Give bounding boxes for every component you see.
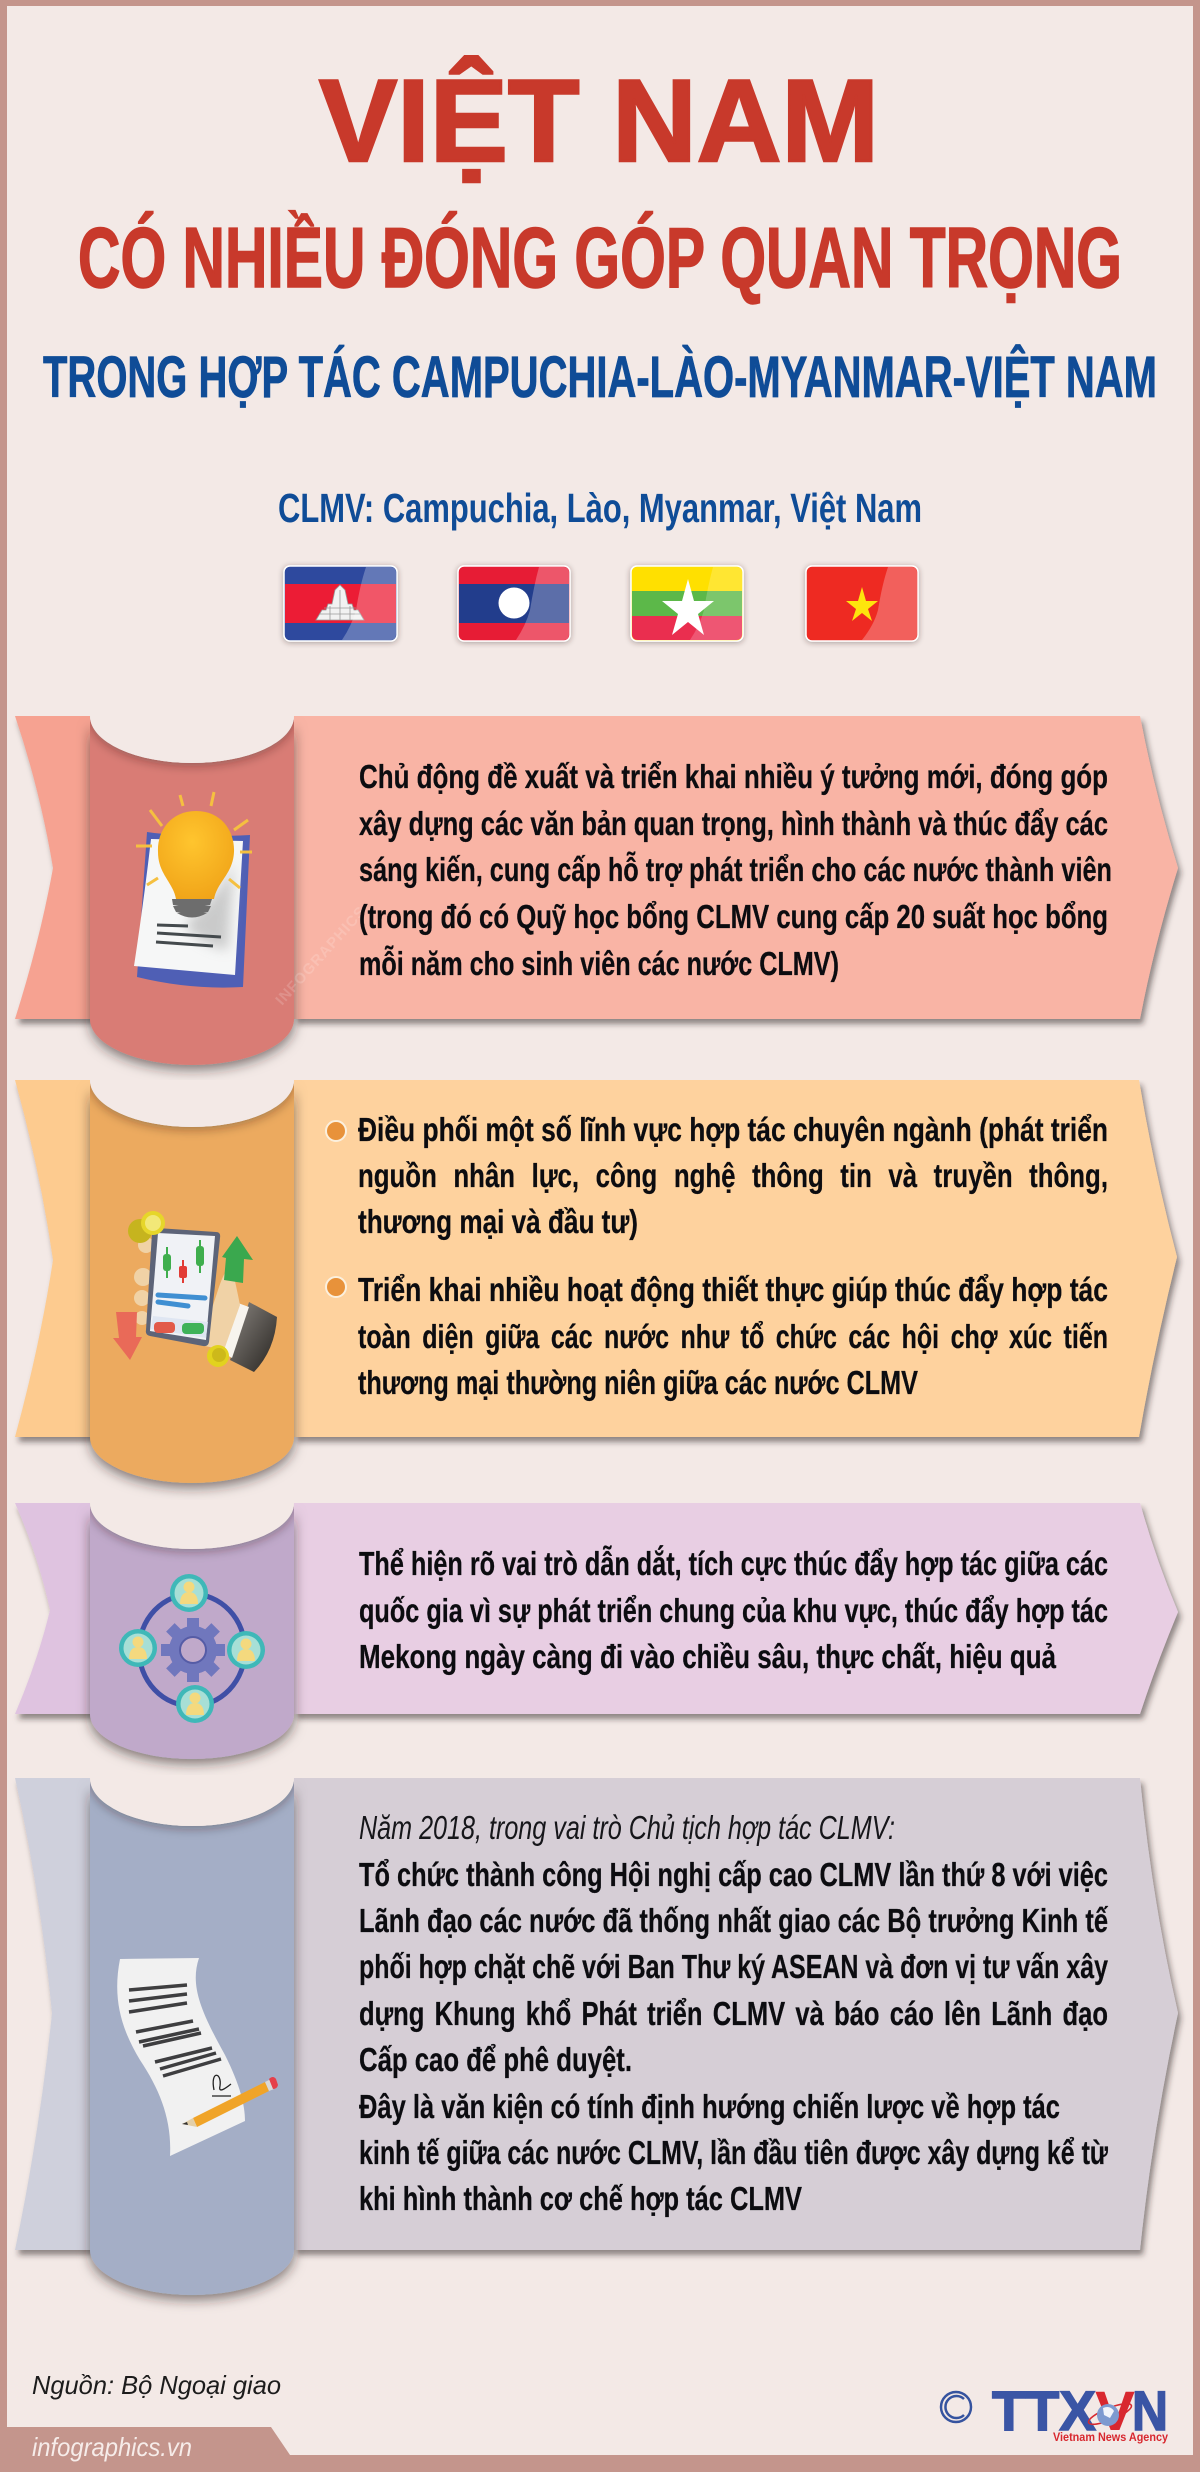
footer band [0,2427,1200,2472]
icon: gear with people network [119,1574,265,1723]
icon: signed document and pencil [117,1958,278,2156]
bullet 1 [326,1121,346,1141]
gear [161,1618,225,1682]
source note: Nguồn: Bộ Ngoại giao [32,2370,281,2400]
logo letters TTX: TTX [992,2379,1096,2442]
panel 2 text: thương mại và đầu tư) [358,1203,638,1240]
flag: Vietnam [806,566,918,641]
panel 4 text: Cấp cao để phê duyệt. [359,2041,632,2078]
panel 4 text: Năm 2018, trong vai trò Chủ tịch hợp tác CLMV: [359,1809,895,1846]
subtitle: CLMV definition: CLMV: Campuchia, Lào, Myanmar, Việt Nam [278,485,922,531]
flags row [284,566,918,641]
panel 2 ribbon [15,1064,1177,1483]
logo: TTXVN Vietnam News Agency [941,2379,1169,2444]
footer site name: infographics.vn [32,2432,192,2462]
person badge left [119,1629,157,1667]
panel 1 text: mỗi năm cho sinh viên các nước CLMV) [359,945,839,982]
panel 2: coordination [15,1064,1177,1483]
panel 2 text [358,1111,1108,1401]
panel 4 text [359,1809,1108,2217]
title line 1: VIỆT NAM [319,55,879,186]
logo letter N: N [1132,2379,1168,2442]
flag: Laos [458,566,570,641]
panel 2 text: thương mại thường niên giữa các nước CLMV [358,1364,918,1401]
panel 4 ribbon [15,1762,1178,2295]
panel 3: leadership [15,1487,1178,1759]
panel 4: 2018 chairmanship [15,1762,1178,2295]
panel 3 text [359,1545,1108,1675]
flag: Myanmar [631,566,743,641]
panel 3 ribbon [15,1487,1178,1759]
logo tagline: Vietnam News Agency [1053,2432,1169,2444]
flag: Cambodia [284,566,397,641]
bullet 2 [326,1277,346,1297]
logo globe and orbit [1086,2400,1134,2428]
icon: light bulb on notepad [134,792,252,988]
panel 4 text: khi hình thành cơ chế hợp tác CLMV [359,2180,802,2217]
person badge top [170,1574,208,1612]
panel 1: initiatives [15,700,1178,1065]
panel 1 text [359,758,1112,982]
copyright symbol [941,2392,971,2422]
person badge right [227,1631,265,1669]
title [43,55,1157,410]
icon: phone with stock chart in hand [113,1211,277,1372]
watermark: INFOGRAPHICS [272,903,370,1009]
logo letter V: V [1095,2379,1135,2442]
person badge bottom [176,1685,214,1723]
panel 1 ribbon [15,700,1178,1065]
